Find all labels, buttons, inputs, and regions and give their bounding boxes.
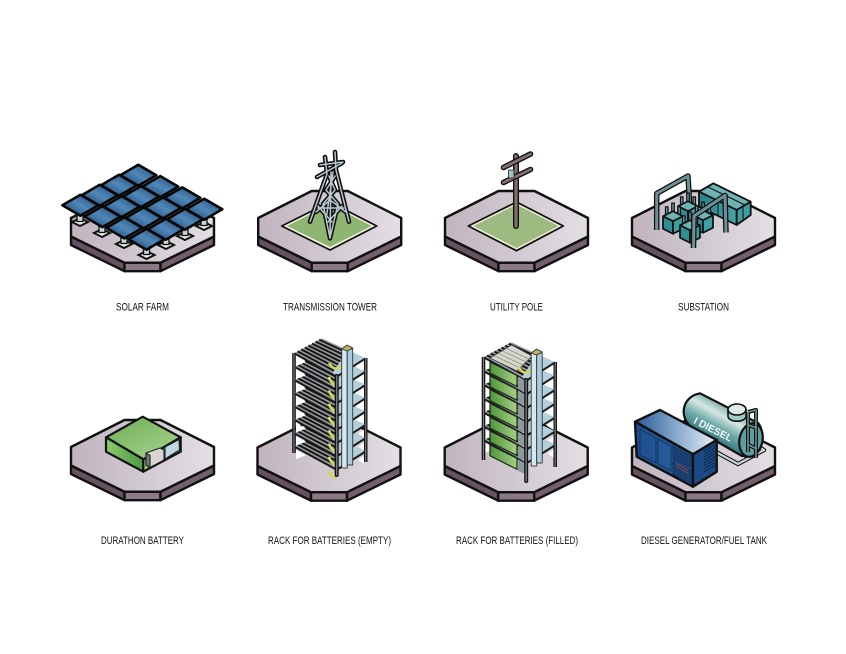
front post (335, 376, 339, 475)
platform: diesel (632, 420, 775, 501)
battery mesh top (490, 345, 532, 371)
label: transmission tower: TRANSMISSION TOWER (283, 302, 377, 314)
generator louvres (704, 444, 715, 472)
platform: empty rack (258, 420, 400, 501)
shelves (294, 338, 366, 478)
icon: transmission tower (258, 152, 401, 271)
label: solar farm: SOLAR FARM (116, 302, 169, 314)
icon: filled battery rack (445, 342, 588, 501)
cable column (342, 345, 353, 468)
icon: substation (632, 176, 775, 271)
fuel tank (684, 393, 766, 459)
tank lettering: I DIESEL (692, 416, 734, 445)
icon: utility pole (445, 154, 588, 271)
icon: empty battery rack (258, 338, 400, 501)
transformer can (508, 170, 514, 178)
label: utility pole: UTILITY POLE (490, 302, 543, 314)
icon: diesel generator and fuel tank (632, 393, 775, 501)
label: durathon battery: DURATHON BATTERY (101, 535, 184, 547)
icon: durathon battery (71, 417, 214, 500)
battery enclosure (106, 417, 181, 472)
label: filled rack: RACK FOR BATTERIES (FILLED) (456, 535, 578, 547)
steel frame: rear (657, 176, 690, 230)
platform: substation (632, 191, 775, 271)
cable column (531, 349, 542, 466)
rear posts (484, 357, 555, 467)
panel stands (72, 212, 212, 259)
cable arc: top (329, 363, 343, 369)
small transformers (663, 192, 713, 243)
platform: transmission tower (258, 191, 401, 271)
steel frame: front (694, 196, 726, 248)
label: empty rack: RACK FOR BATTERIES (EMPTY) (268, 535, 391, 547)
generator enclosure (635, 410, 717, 487)
front post (524, 380, 528, 481)
platform: filled rack (445, 420, 588, 501)
pole and crossarms (504, 154, 530, 226)
label: substation: SUBSTATION (678, 302, 729, 314)
grass plot: tower (282, 202, 377, 250)
cable arc: top (518, 367, 532, 373)
solar panel array (62, 165, 222, 250)
large teal switchgear units (699, 183, 751, 225)
label: diesel: DIESEL GENERATOR/FUEL TANK (641, 535, 768, 547)
side posts highlight (294, 353, 366, 462)
lattice tower (310, 152, 349, 238)
platform: utility pole (445, 191, 588, 271)
shelves with batteries (484, 342, 555, 475)
platform: battery (71, 420, 214, 500)
battery connector box (146, 440, 180, 468)
tank skid and pipes (716, 438, 764, 464)
platform: solar farm (71, 191, 214, 271)
generator doors and panels (640, 429, 691, 483)
icon: solar farm (62, 165, 222, 271)
tank ladder frame (748, 410, 757, 458)
rear posts (294, 353, 366, 462)
grass plot: pole (468, 202, 563, 251)
side posts highlight (484, 357, 555, 467)
